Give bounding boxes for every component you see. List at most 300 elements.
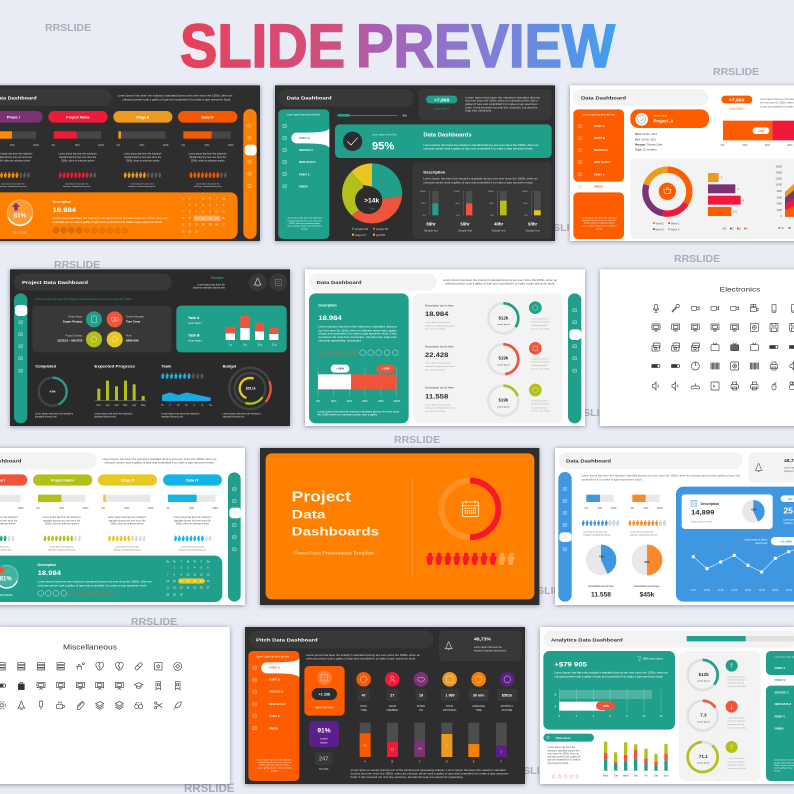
remote note: industry's standard dummy text: [193, 287, 225, 290]
tick labels: 100%: [228, 145, 234, 147]
horizontal bars: 3: [737, 187, 739, 191]
header bar: [0, 89, 112, 106]
people captions: [583, 531, 658, 536]
ratio bar: 20%: [331, 399, 337, 403]
calendar: 21: [182, 224, 185, 227]
people captions: industry's standard dummy text: [63, 185, 91, 188]
orange summary panel: [0, 192, 238, 239]
project details: Team: 12 members: [635, 149, 657, 152]
donut chart: >14k: [364, 197, 379, 204]
vertical bars: 5: [446, 743, 448, 747]
orange detail card: [304, 666, 345, 716]
side menu: Lorem Ipsum has been the best: [287, 113, 320, 116]
star rating: ☆: [563, 773, 568, 780]
right stat: industry's: [783, 522, 794, 525]
team people: [161, 373, 204, 379]
column text: Lorem Ipsum has been the industry's: [108, 516, 147, 519]
column text: standard dummy text ever since the: [174, 519, 211, 522]
top stat panel: >7,899: [434, 97, 450, 103]
gauge labels: 100%: [488, 191, 494, 193]
revenue bar chart: 0: [559, 714, 561, 718]
teal panel: of type and scrambled it to make a type specimen book. It has: [318, 333, 398, 336]
side menu: NEW DATA D: [775, 702, 791, 706]
rings panel: 7.3: [700, 713, 707, 718]
rating dots: [38, 590, 113, 596]
calendar: 21: [166, 587, 170, 590]
top stat panel: book. It has survived not only five centuries, but also the: [465, 106, 538, 109]
people row: [426, 553, 515, 565]
vertical bars: [360, 723, 507, 764]
tick labels: 0%: [102, 508, 105, 510]
teal banner: Data Dashboards: [423, 132, 472, 138]
footer text: book. It has survived not only five centuries, but also the leap into electronic typesetting.: [351, 776, 464, 779]
teal panel: [309, 293, 409, 423]
gauge values: [424, 222, 540, 232]
gauge labels: 100%: [420, 191, 426, 193]
pie charts: 42%: [599, 554, 605, 558]
vertical bars: D: [446, 760, 448, 764]
gauge labels: 50%: [455, 203, 460, 205]
side menu: standard dummy text ever since the: [287, 219, 322, 222]
donut legend: product AN: [355, 227, 368, 231]
calendar: 29: [173, 593, 176, 596]
remote note: [193, 276, 226, 290]
vertical bars: 3.4: [418, 747, 422, 751]
line chart note: +19.1658: [779, 540, 792, 544]
intro text: [102, 458, 217, 465]
rings panel: 71.1: [699, 754, 708, 759]
watermarks: RRSLIDE: [45, 22, 91, 34]
side navigation: [568, 293, 581, 423]
star rating: ☆: [557, 773, 562, 780]
calendar: 9: [181, 573, 183, 576]
stats panel: been the industry's: [531, 403, 549, 406]
gauge values: 93hr: [528, 222, 538, 227]
stat rows: Description text is here: [425, 304, 454, 308]
pie charts: 50%: [644, 560, 650, 564]
watermarks: RRSLIDE: [568, 407, 614, 419]
description: 18.984: [53, 207, 76, 214]
panel: slide 9 white blue dashboard: [555, 448, 794, 605]
progress bars: May: [141, 404, 146, 407]
section headings: [35, 363, 237, 369]
side text: unknown printer took a galley of: [547, 756, 581, 759]
people captions: industry's standard dummy text: [194, 185, 222, 188]
cover subtitle: PowerPoint Presentation Template: [294, 550, 375, 555]
top stat panel: [418, 89, 552, 120]
header bar: [0, 452, 97, 469]
teal panel: Lorem Ipsum has been the industry's standard dummy: [318, 326, 398, 329]
people captions: Lorem Ipsum has been the: [196, 182, 220, 185]
project info panel: 12/12/21 – 06/17/25: [57, 338, 83, 342]
progress bar: 40%: [765, 143, 771, 147]
side menu: FINISH: [269, 726, 278, 730]
hours box: 247: [319, 756, 328, 762]
pie labels: $45k: [640, 591, 655, 598]
star rating: ☆: [551, 773, 556, 780]
stats panel: Lorem Ipsum: [497, 323, 510, 326]
white card: Description: [701, 502, 719, 506]
teal summary panel: [0, 556, 222, 602]
side menu: [248, 651, 299, 781]
top stat panel: Lorem Ipsum has been the industry's standard dummy: [465, 97, 541, 100]
vertical bars: 3.3: [390, 747, 395, 751]
panel: slide 6 electronics icons: [600, 269, 794, 426]
side menu: POINT E: [299, 172, 310, 176]
side text: industry's standard dummy text: [547, 749, 580, 752]
pie labels: Description text is here: [634, 585, 660, 588]
side menu: took a galley of type and scrambled: [287, 225, 322, 228]
calendar: 8: [189, 210, 191, 213]
top stat panel: [749, 452, 794, 483]
progress bars: [585, 495, 663, 510]
rings panel: been the industry's: [728, 760, 746, 763]
horizontal bars: [708, 173, 744, 216]
rings panel: [679, 651, 761, 781]
calendar: 30: [180, 593, 183, 596]
side menu: 1500s, when an unknown printer: [259, 764, 290, 767]
stats panel: Lorem Ipsum has: [531, 357, 548, 360]
progress bars: [0, 131, 231, 139]
side menu: 1500s, when an unknown printer: [584, 222, 615, 225]
calendar: 2: [181, 567, 183, 570]
stat rows: 11.558: [425, 393, 449, 400]
rings panel: Lorem Ipsum has: [728, 675, 744, 678]
calendar: 23: [195, 224, 198, 227]
calendar: 1: [189, 204, 191, 207]
top stat panel: industry's: [784, 470, 794, 473]
header bar: [558, 452, 743, 469]
people captions: industry's standard dummy text: [630, 533, 658, 536]
header bar: Project Data Dashboard: [22, 280, 88, 286]
gauge values: 59hr: [460, 222, 470, 227]
area chart: Su: [209, 404, 213, 407]
calendar: 7: [182, 210, 184, 213]
calendar: W: [187, 561, 190, 564]
section headings: Budget: [223, 364, 237, 369]
calendar: 25: [209, 224, 212, 227]
panel: slide 11 pitch data dashboard: [245, 627, 525, 784]
side menu: SERVICE C: [269, 690, 283, 694]
phase pills: Phase I: [7, 115, 20, 119]
captions: Lorem Ipsum has been the industry's: [35, 412, 74, 415]
teal panel: Lorem Ipsum has been the industry's standard dummy text ever since: [317, 410, 400, 413]
people captions: industry's standard dummy text: [583, 533, 611, 536]
side menu: standard dummy text: [774, 761, 794, 764]
phase pills: Data IV: [186, 478, 199, 482]
tick labels: 50%: [75, 145, 80, 147]
budget rings: [224, 362, 276, 415]
rings panel: text ever the 1500s: [728, 685, 746, 688]
area chart: S: [201, 404, 203, 407]
progress bars: Feb: [115, 404, 119, 407]
hours box: [315, 752, 333, 771]
stat rows: 18.984: [425, 311, 449, 318]
calendar: 11: [193, 573, 197, 576]
stats panel: text ever the 1500s: [531, 368, 550, 371]
stat pill: Lorem Ipsum: [729, 106, 745, 110]
people captions: industry's standard dummy text: [179, 548, 206, 551]
title: PREVIEW: [356, 12, 615, 80]
calendar: 29: [188, 230, 192, 233]
progress bars: 50%: [644, 508, 648, 510]
stat rows: Lorem Ipsum has been the: [425, 362, 451, 365]
rings panel: standard dummy: [728, 682, 745, 685]
captions: [35, 412, 262, 419]
ratio bar: [316, 365, 401, 403]
value labels: [360, 704, 514, 712]
value labels: MONTHLY: [501, 704, 514, 708]
line chart note: [744, 537, 794, 545]
gauge values: 89hr: [426, 222, 436, 227]
calendar: Su: [166, 561, 170, 564]
people captions: Lorem Ipsum has been the: [50, 546, 74, 549]
teal revenue panel: +$79 905: [554, 662, 588, 669]
tick labels: 100%: [82, 508, 88, 510]
gauge labels: 100%: [454, 191, 460, 193]
calendar: 5: [201, 567, 203, 570]
column text: standard dummy text ever since the: [59, 156, 97, 159]
people captions: industry's standard dummy text: [113, 548, 141, 551]
vertical bars: A: [364, 760, 366, 764]
gauge labels: 0%: [525, 215, 528, 217]
vertical bars: 4.3: [363, 743, 367, 747]
header bar: [573, 89, 708, 106]
bars legend: B: [739, 229, 741, 231]
ratio bar: 100%: [393, 399, 401, 403]
donut legend: part HR: [376, 233, 385, 237]
success gauge: SUCCESS: [14, 230, 27, 234]
star rating: ☆: [569, 773, 574, 780]
icon grid: [0, 662, 182, 710]
progress bars: Mar: [123, 404, 128, 407]
calendar: 4: [194, 567, 196, 570]
gauge labels: 0%: [457, 215, 460, 217]
ratio bar: 40%: [347, 399, 353, 403]
teal panel: text ever since the 1500s, when an unknown printer took a galley: [318, 329, 397, 332]
people captions: Lorem Ipsum has been the: [130, 182, 155, 185]
area chart: 8000: [777, 191, 783, 193]
side menu: [573, 109, 624, 239]
intro text: Lorem Ipsum has been the industry's standard dummy text ever since the 1500s, when an: [102, 458, 217, 461]
calendar: F: [201, 561, 203, 564]
value labels: MORE: [417, 704, 425, 708]
tick labels: 50%: [10, 145, 15, 147]
calendar: 28: [182, 230, 185, 233]
side menu: it book.: [271, 769, 278, 772]
right stat: [781, 495, 794, 525]
line chart: [691, 547, 794, 592]
stats panel: Lorem Ipsum: [497, 364, 510, 367]
calendar: Th: [193, 561, 197, 564]
header bar: [309, 273, 437, 291]
orange detail card: NEW DETAILS: [315, 705, 333, 709]
project pill: Lorem Ipsum: [653, 114, 667, 117]
calendar: 17: [202, 217, 205, 220]
task chart panel: 1 g: [229, 345, 233, 347]
intro text: Lorem Ipsum has been the industry's standard dummy text ever since the 1500s, when an unknown printer took a galley of type and: [581, 475, 741, 478]
people captions: Lorem Ipsum has been the: [181, 546, 205, 549]
captions: Lorem Ipsum has been the industry's: [223, 412, 262, 415]
calendar: 27: [222, 224, 225, 227]
pie labels: 11.558: [591, 591, 611, 598]
remote note: Remote: [211, 276, 224, 280]
side menu: POINT A: [269, 666, 280, 670]
project info panel: Project Duration: [66, 334, 83, 337]
right stat: 25: [783, 505, 793, 515]
calendar: 23: [180, 587, 183, 590]
purple stat card: Ipsum: [320, 740, 328, 744]
rings panel: text ever the 1500s: [728, 767, 746, 770]
project pill: Project .A: [653, 118, 674, 123]
rings panel: Lorem Ipsum: [697, 721, 710, 724]
area chart: [161, 392, 213, 407]
line chart: 12:00: [731, 589, 738, 592]
progress bar: 0%: [721, 143, 725, 147]
task chart panel: Lorem Ipsum: [188, 322, 202, 325]
section headings: Completed: [35, 363, 56, 368]
completed gauge: 42%: [50, 389, 56, 393]
stats panel: been the industry's: [531, 361, 549, 364]
description: unknown printer took a galley of type and scrambled it to make a type specimen book.: [53, 221, 163, 224]
footer text: Lorem Ipsum is simply dummy text of the printing and typesetting industry. Lorem Ipsum has been the industry's standard: [351, 769, 506, 772]
calendar: 28: [166, 593, 170, 596]
side menu: POINT E: [775, 714, 786, 718]
phase pills: Stage II: [121, 478, 134, 482]
area chart: W: [177, 404, 180, 407]
teal banner: Lorem Ipsum has been the industry's standard dummy text ever since the 1500s, when an: [423, 144, 539, 147]
gauge bars: [429, 191, 541, 215]
area chart: 6000: [777, 197, 783, 199]
side menu: NEW DATA D: [269, 702, 286, 706]
area chart: Th: [185, 404, 188, 407]
task chart panel: Task A: [188, 316, 200, 320]
stats panel: [413, 293, 563, 423]
teal note: Lorem Ipsum has been the industry's standard dummy text ever since the 1500s: [35, 298, 132, 301]
description: 18.984: [38, 570, 61, 577]
stacked bars: Sat: [654, 773, 658, 777]
top stat panel: 48,73%: [474, 637, 491, 643]
vertical bars: 2: [501, 749, 503, 753]
gauge labels: 100%: [522, 191, 528, 193]
calendar: 6: [207, 567, 209, 570]
tick labels: 50%: [189, 508, 194, 510]
purple stat card: Lorem: [320, 736, 329, 740]
watermarks: RRSLIDE: [54, 259, 100, 271]
tick labels: 100%: [18, 508, 24, 510]
cover title: [292, 490, 379, 538]
rings panel: standard dummy: [728, 764, 745, 767]
tick labels: 0%: [166, 508, 170, 510]
area chart: M: [161, 404, 163, 407]
progress bars: 0%: [585, 508, 588, 510]
phase pills: Stage II: [136, 115, 149, 119]
captions: standard dummy text: [35, 416, 57, 419]
description: Lorem Ipsum has been the industry's standard dummy text ever since the 1500s, when an: [38, 581, 152, 584]
gauge values: Sample text: [492, 228, 506, 232]
tick labels: 100%: [163, 145, 169, 147]
line chart note: Lorem Ipsum & others: [744, 539, 768, 542]
value labels: INCOMING: [443, 708, 456, 712]
heading: Miscellaneous: [63, 645, 118, 652]
value boxes: 19: [419, 693, 423, 697]
teal revenue panel: 1986 Lorem Ipsum: [642, 658, 663, 661]
project details: [635, 133, 663, 152]
gauge labels: 50%: [523, 203, 528, 205]
stat pill: >7,899: [729, 97, 745, 103]
watermarks: RRSLIDE: [508, 765, 554, 777]
stat rows: ever since the 1500s: [425, 368, 445, 371]
donut legend: Week 4: [671, 228, 680, 231]
stats panel: standard dummy: [531, 364, 548, 367]
side text: Lorem Ipsum has been the: [547, 746, 576, 749]
stats panel: Lorem Ipsum has: [531, 317, 548, 320]
stats panel: text ever the 1500s: [531, 410, 550, 413]
progress bars: 50%: [598, 508, 602, 510]
calendar: 19: [200, 580, 203, 583]
task chart panel: Task B: [188, 333, 200, 337]
teal panel: Description: [318, 304, 337, 308]
area chart: 0: [781, 216, 783, 218]
side navigation: [243, 109, 257, 239]
intro text: [581, 475, 741, 481]
revenue bar chart: 6: [609, 714, 611, 718]
intro text: Lorem Ipsum has been the industry's standard dummy text ever since the 1500s, when an: [306, 654, 421, 657]
calendar: 4: [209, 204, 211, 207]
people captions: Lorem Ipsum has been the: [583, 531, 608, 534]
rings panel: Lorem Ipsum: [697, 762, 710, 765]
revenue bar chart: B: [554, 693, 556, 697]
top stat panel: Lorem Ipsum has been the: [474, 646, 502, 649]
tick labels: 50%: [59, 508, 64, 510]
calendar: 26: [200, 587, 203, 590]
description: Description: [53, 200, 71, 204]
success gauge: 81%: [0, 577, 12, 583]
side menu: POINT A: [775, 666, 785, 670]
line chart: 9:00: [691, 589, 696, 592]
description panel: Lorem Ipsum has been the industry's standard dummy text ever since the 1500s, when an: [423, 178, 538, 181]
value labels: TIME: [475, 708, 482, 712]
progress bar: +16%: [758, 129, 765, 133]
calendar: M: [173, 561, 175, 564]
side menu: took a galley of type and scrambled: [257, 766, 292, 769]
stats panel: $19k: [499, 397, 509, 402]
calendar: 2: [196, 204, 198, 207]
top stat panel: industry's standard dummy text: [474, 649, 506, 652]
calendar: [181, 198, 225, 233]
area chart: 16000: [776, 166, 783, 168]
cover title: Project: [292, 490, 351, 506]
project details: Start: 13 Dec, 2021: [635, 133, 658, 136]
calendar: Th: [209, 198, 212, 201]
icon: box: [269, 273, 287, 291]
rings panel: been the industry's: [728, 720, 746, 723]
calendar: 10: [187, 573, 190, 576]
pie labels: [588, 585, 660, 598]
column text: 1500s, when an unknown printer: [110, 523, 144, 526]
column text: 1500s, when an unknown printer: [191, 159, 225, 162]
value labels: HR: [419, 708, 423, 712]
column text: 1500s, when an unknown printer: [61, 159, 95, 162]
project details: Manager: Thomas Crain: [635, 144, 663, 147]
indicator circles: [726, 660, 738, 753]
side menu: FINISH: [594, 185, 603, 189]
vertical bars: F: [501, 760, 503, 764]
vertical bars: 3: [473, 749, 475, 753]
white card: Lorem Ipsum is here: [691, 520, 713, 523]
teal banner: 95%: [372, 140, 395, 152]
watermarks: RRSLIDE: [538, 222, 584, 234]
